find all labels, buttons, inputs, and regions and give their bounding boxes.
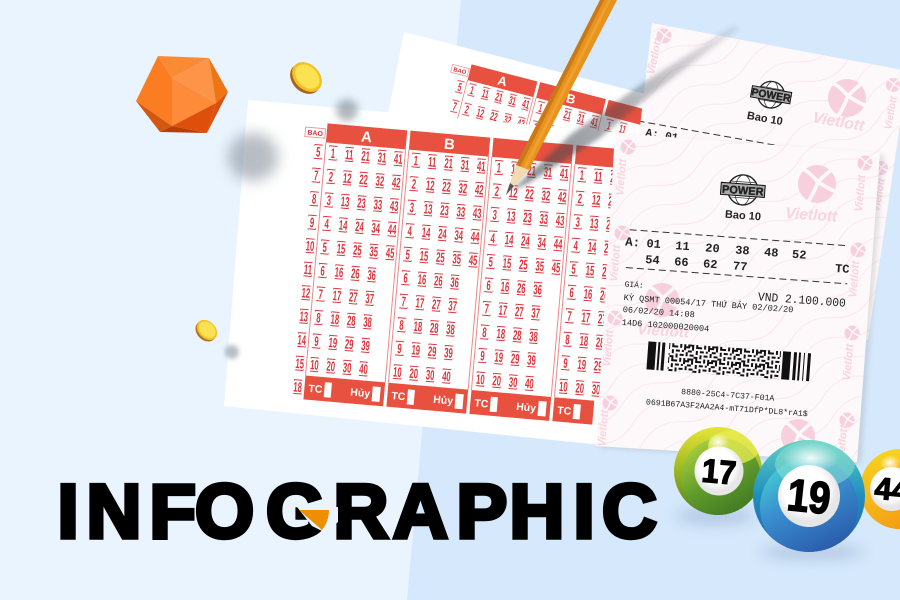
side numbers: 15 <box>295 357 305 372</box>
block A: 44 <box>387 223 398 238</box>
pencil shadow <box>510 25 738 192</box>
block A: 27 <box>348 290 358 306</box>
side numbers: 11 <box>303 263 313 278</box>
ball 19 <box>753 440 865 556</box>
block A: TC <box>308 383 323 396</box>
block B: 43 <box>472 206 482 222</box>
label BAO <box>305 127 326 138</box>
block A: 9 <box>314 335 319 350</box>
block B: 22 <box>442 180 451 196</box>
block C: 44 <box>553 237 563 253</box>
block B: 7 <box>401 295 406 310</box>
block A: 14 <box>338 218 349 234</box>
icon: gold coin large <box>284 56 328 100</box>
back form block A: 32 <box>502 113 512 128</box>
ticket codes <box>646 385 809 419</box>
back lottery ticket <box>620 23 900 340</box>
block B: 14 <box>421 226 431 241</box>
ticket watermarks: Vietlott <box>614 157 629 196</box>
ticket numbers: 54 <box>645 253 660 268</box>
block C: 1 <box>496 161 502 176</box>
block C: TC <box>474 397 489 411</box>
ball shadows <box>675 507 864 560</box>
block B: 29 <box>427 345 437 360</box>
block A: 21 <box>361 149 370 165</box>
ticket watermarks: Vietlott <box>853 173 868 212</box>
block D: 21 <box>610 171 619 187</box>
label BAO: BAO <box>307 130 324 138</box>
back form block A: 41 <box>521 98 531 113</box>
block A: 41 <box>393 152 403 168</box>
block A: 11 <box>345 148 354 163</box>
ball 44 <box>860 449 900 532</box>
block A: 2 <box>328 170 334 185</box>
barcode <box>646 341 811 381</box>
block B: 44 <box>470 230 480 246</box>
block B: 40 <box>441 370 451 385</box>
back form block A: A <box>496 73 509 89</box>
back ticket watermarks <box>645 28 900 213</box>
block A: 39 <box>361 339 370 354</box>
block C: 10 <box>475 373 485 388</box>
back form block A: 33 <box>497 133 507 148</box>
block B: 28 <box>429 321 439 337</box>
block A: 22 <box>359 173 368 188</box>
side numbers <box>288 139 327 399</box>
block C: 30 <box>508 375 518 391</box>
back form block A: 43 <box>510 136 521 151</box>
block C: 38 <box>529 330 538 345</box>
block C: 27 <box>514 305 524 320</box>
block B: 32 <box>458 182 468 197</box>
block A <box>303 123 409 406</box>
block B: 37 <box>448 299 457 315</box>
block D: 4 <box>573 239 579 254</box>
back form label BAO <box>451 64 469 77</box>
block C: Hủy <box>516 401 537 415</box>
block C: 19 <box>494 350 504 366</box>
ticket numbers: 77 <box>732 259 748 274</box>
ticket details <box>621 281 846 344</box>
ticket details: 06/02/20 14:08 <box>622 305 695 320</box>
back form block A: 13 <box>470 126 480 141</box>
back ticket Power logo <box>750 80 792 109</box>
ticket dashed line bottom <box>626 268 847 284</box>
side numbers: 12 <box>301 286 311 302</box>
back form block A: 1 <box>468 84 475 98</box>
side numbers: 7 <box>313 169 319 184</box>
block D: TC <box>557 405 572 418</box>
back form block A: 3 <box>458 123 465 137</box>
block B: 42 <box>474 183 484 198</box>
block B: 15 <box>419 249 429 265</box>
icon: Power logo: POWER <box>722 184 764 199</box>
block A: 4 <box>324 217 330 232</box>
front lottery ticket <box>596 133 884 464</box>
block C: 40 <box>524 377 534 392</box>
block A: 18 <box>330 312 340 328</box>
block D: 23 <box>606 218 615 234</box>
block D: 20 <box>575 381 585 397</box>
back form block B: 1 <box>537 102 544 116</box>
block B <box>386 131 492 414</box>
back ticket watermarks: Vietlott <box>645 36 665 76</box>
block A: 30 <box>342 361 352 376</box>
block C: 21 <box>527 164 536 179</box>
back form block B: 22 <box>557 128 567 143</box>
block D: 22 <box>608 195 617 210</box>
block D: 2 <box>577 192 583 207</box>
ticket details: KỲ QSMT 00054/17 THỨ BẢY 02/02/20 <box>623 291 794 315</box>
block B: 5 <box>405 248 410 263</box>
back form block B: 32 <box>571 131 581 146</box>
block B: 11 <box>428 155 437 171</box>
ticket dashed line top <box>630 230 849 246</box>
block B: 18 <box>413 320 423 335</box>
block C: 43 <box>555 214 565 229</box>
back form block A: 11 <box>480 87 490 102</box>
block A: 25 <box>352 243 362 259</box>
block B: 34 <box>454 229 464 244</box>
block D: 12 <box>591 193 601 209</box>
block B: 24 <box>438 227 448 243</box>
block C: 14 <box>504 233 514 248</box>
ticket numbers: TC <box>835 262 850 277</box>
block C: 17 <box>498 303 508 319</box>
block B: 4 <box>407 224 413 240</box>
ticket numbers: 38 <box>735 244 750 259</box>
block A: 29 <box>344 337 354 353</box>
block B: 13 <box>423 202 433 218</box>
back form block B: 21 <box>562 108 572 123</box>
block C: 12 <box>508 186 518 201</box>
block C: 16 <box>500 280 510 295</box>
block C: 28 <box>512 328 522 344</box>
block D: 29 <box>593 359 603 375</box>
front lottery form <box>224 100 660 449</box>
block C: 9 <box>480 349 485 364</box>
ticket watermarks: Vietlott <box>785 205 839 226</box>
ticket watermarks: Vietlott <box>608 243 623 282</box>
back form block B <box>519 82 607 181</box>
block D: 8 <box>565 333 570 348</box>
block D: 1 <box>579 168 585 184</box>
back form side numbers: 5 <box>456 81 463 95</box>
back lottery form <box>385 32 700 200</box>
back form block A: 12 <box>475 106 485 121</box>
ticket details: VND 2.100.000 <box>757 290 846 311</box>
block B: Hủy <box>433 394 454 407</box>
block A: 19 <box>328 336 338 351</box>
block C: 15 <box>502 256 512 272</box>
back form block A: 22 <box>488 110 499 125</box>
block C: 5 <box>488 255 493 270</box>
block A: 33 <box>373 198 383 213</box>
block C: 35 <box>535 259 545 275</box>
block A: 12 <box>342 171 352 187</box>
block A: 35 <box>369 245 379 260</box>
back form block B: 41 <box>589 115 599 130</box>
block D: 10 <box>558 380 568 395</box>
block D: 3 <box>575 215 580 231</box>
ticket numbers: 20 <box>705 241 720 256</box>
block A: 20 <box>326 359 336 375</box>
side numbers: 10 <box>305 239 315 255</box>
block B: B <box>443 136 456 154</box>
ticket watermarks <box>596 140 872 462</box>
block C: 26 <box>516 281 526 297</box>
block A: 43 <box>389 199 399 215</box>
block D: 11 <box>594 170 603 185</box>
block B: 19 <box>411 343 421 359</box>
block A: 37 <box>365 292 374 307</box>
block D: 27 <box>597 312 607 328</box>
G letter cut-out <box>297 507 338 533</box>
block D: 14 <box>587 240 597 256</box>
block B: 38 <box>446 323 455 338</box>
back ticket watermarks: Vietlott <box>883 95 900 131</box>
ticket watermarks: Vietlott <box>847 259 862 298</box>
block A: 38 <box>363 315 372 331</box>
ticket numbers: 01 <box>646 237 661 252</box>
back form block B: 11 <box>549 105 559 120</box>
ball 19: 19 <box>785 469 833 524</box>
side numbers: 5 <box>315 145 321 160</box>
block B: 31 <box>460 158 470 174</box>
title: INFOGRAPHIC: INFOGRAPHIC <box>58 470 657 554</box>
back form side numbers <box>446 75 469 118</box>
back form block C <box>600 100 675 150</box>
block A: 15 <box>336 242 346 257</box>
blurred spot shadows <box>225 99 358 359</box>
block B: 21 <box>444 157 453 172</box>
block B: 26 <box>433 274 443 290</box>
block B: 16 <box>417 273 427 288</box>
block B: 6 <box>403 271 408 287</box>
ticket watermarks: Vietlott <box>835 423 850 462</box>
block D: 24 <box>603 242 614 257</box>
block B: 3 <box>409 201 415 216</box>
block D: 25 <box>601 265 611 281</box>
block C: 23 <box>523 211 532 226</box>
block A: 10 <box>310 358 319 374</box>
block B: 39 <box>444 346 453 362</box>
back ticket dashes and numbers: A: 01 <box>644 128 679 145</box>
back form block B: 2 <box>532 121 539 135</box>
block B: 8 <box>399 318 404 334</box>
block B: 27 <box>431 298 441 313</box>
block C: 22 <box>525 187 534 203</box>
ticket numbers: 52 <box>792 248 807 263</box>
block D: 19 <box>577 358 587 373</box>
block C: 45 <box>551 261 561 276</box>
ball 17 <box>674 427 762 518</box>
pencil <box>506 0 617 195</box>
block B: 33 <box>456 205 466 221</box>
block A: 5 <box>322 241 327 256</box>
block D: 13 <box>589 217 599 232</box>
back form block B: 12 <box>544 124 554 139</box>
block D: 17 <box>581 311 591 326</box>
icon: Power logo <box>720 173 766 206</box>
ticket watermarks: Vietlott <box>637 321 691 342</box>
back form block B: B <box>565 90 577 107</box>
block B: 2 <box>411 177 417 193</box>
block C: 24 <box>520 234 531 250</box>
block B: TC <box>391 390 406 403</box>
block B: 20 <box>409 367 419 382</box>
block C: 20 <box>492 374 502 389</box>
block B: 25 <box>435 251 445 266</box>
ball 17: 17 <box>700 452 738 491</box>
back ticket watermarks: Vietlott <box>871 177 888 213</box>
block A: 13 <box>340 195 350 210</box>
block A: 6 <box>320 264 325 279</box>
ticket numbers: A: <box>625 235 641 251</box>
block A: 34 <box>371 221 381 237</box>
ticket numbers: 11 <box>675 239 690 254</box>
block C: 39 <box>527 353 536 369</box>
ticket numbers: 48 <box>764 246 779 261</box>
block B: 9 <box>397 342 402 357</box>
block A: 24 <box>355 220 365 235</box>
side numbers: 8 <box>311 192 317 208</box>
block A: 17 <box>332 289 342 304</box>
block D: 16 <box>583 287 593 303</box>
ticket numbers: 62 <box>703 257 718 272</box>
block A: 36 <box>367 268 377 284</box>
block A: 1 <box>330 147 336 162</box>
block D: 26 <box>599 289 609 304</box>
back ticket Bao 10: Bao 10 <box>746 110 784 128</box>
side numbers: 9 <box>309 216 315 231</box>
block A: Hủy <box>350 386 371 400</box>
block A: 16 <box>334 265 344 281</box>
block B: 17 <box>415 296 425 312</box>
side numbers: 13 <box>299 310 309 325</box>
ticket codes: 0691B67A3F2AA2A4-mT71DfP*DL8*rA1$ <box>646 397 808 419</box>
block A: 31 <box>377 151 387 166</box>
block C: 13 <box>506 209 516 225</box>
Bao 10 label: Bao 10 <box>724 209 761 223</box>
back ticket dashes and numbers <box>640 121 782 146</box>
block C: 33 <box>539 212 549 228</box>
back form block A: 42 <box>515 117 526 132</box>
block A: 45 <box>385 246 395 262</box>
side numbers: 14 <box>297 333 307 349</box>
block D: 18 <box>579 334 589 350</box>
block C: 7 <box>484 302 489 317</box>
block B: 1 <box>413 154 419 169</box>
block D: 15 <box>585 264 595 279</box>
block A: 42 <box>391 176 401 191</box>
block B: 23 <box>440 204 449 219</box>
back form block A: 2 <box>463 103 470 118</box>
back form block A: 23 <box>483 129 494 144</box>
block A: 28 <box>346 314 356 329</box>
back ticket watermarks: Vietlott <box>811 109 866 135</box>
block B: 12 <box>425 179 435 194</box>
block B: 45 <box>468 253 478 269</box>
back form side numbers: 7 <box>451 100 458 114</box>
block A: 8 <box>316 311 321 326</box>
block D: 5 <box>571 262 576 278</box>
ticket numbers <box>623 235 851 282</box>
block A: 40 <box>359 362 368 378</box>
block D: 30 <box>591 383 601 398</box>
block C: 8 <box>482 326 487 341</box>
block D: 28 <box>595 336 605 351</box>
back form block A: 31 <box>507 94 517 109</box>
back form label BAO: BAO <box>452 67 467 76</box>
block D: 6 <box>569 286 574 301</box>
ticket details: 14D6 102000020004 <box>621 318 710 334</box>
ticket numbers: 66 <box>674 255 689 270</box>
back form block A: 21 <box>494 91 504 106</box>
block D <box>552 145 656 428</box>
block C: 42 <box>557 190 567 206</box>
block A: 7 <box>318 288 323 303</box>
block B: 35 <box>452 252 462 268</box>
block C: 6 <box>486 279 491 294</box>
block B: 10 <box>392 365 402 381</box>
back form block A <box>450 64 539 163</box>
block C: 25 <box>518 258 528 273</box>
ticket codes: 8880-25C4-7C37-F01A <box>681 388 775 404</box>
block C: 3 <box>492 208 498 223</box>
ticket watermarks: Vietlott <box>596 408 611 447</box>
block B: 41 <box>476 159 486 175</box>
block A: A <box>360 128 373 146</box>
icon: gold coin small <box>191 316 221 346</box>
back form block C: 11 <box>617 123 627 137</box>
icon: orange polyhedron <box>136 56 228 133</box>
back form block C: 1 <box>605 119 612 134</box>
ticket watermarks: Vietlott <box>841 342 856 381</box>
block C <box>469 138 575 421</box>
block C: 37 <box>531 306 540 322</box>
side numbers: 18 <box>293 380 302 396</box>
block B: 30 <box>425 368 435 384</box>
block A: 26 <box>350 267 360 282</box>
block C: 41 <box>559 167 569 182</box>
block C: 31 <box>543 165 553 181</box>
block D: 7 <box>567 309 572 325</box>
block C: 4 <box>490 232 496 247</box>
block B: 36 <box>450 276 459 291</box>
block D: 9 <box>563 356 568 372</box>
block C: 32 <box>541 189 551 204</box>
block C: 18 <box>496 327 506 342</box>
block C: 34 <box>537 236 547 251</box>
block C: 2 <box>494 185 500 200</box>
ticket details: GIÁ: <box>624 281 644 291</box>
block A: 23 <box>357 196 366 212</box>
back ticket Power logo: POWER <box>751 87 792 105</box>
block A: 3 <box>326 194 332 209</box>
block A: 32 <box>375 174 385 190</box>
G orange wedge <box>299 510 329 530</box>
block C: 36 <box>533 283 542 298</box>
block C: 29 <box>510 352 520 367</box>
block C: 11 <box>511 162 520 178</box>
back form block B: 31 <box>576 112 586 127</box>
back form block B: 42 <box>584 135 594 150</box>
ticket watermarks: Vietlott <box>601 328 616 367</box>
